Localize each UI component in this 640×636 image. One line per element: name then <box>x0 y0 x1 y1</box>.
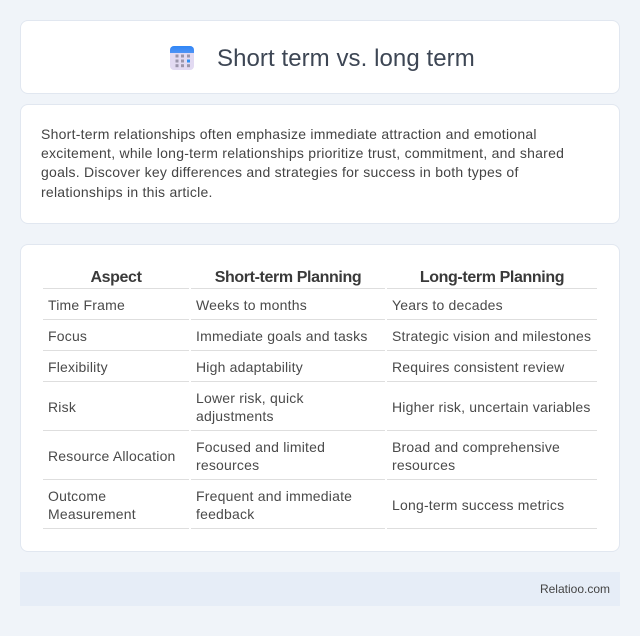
cell: Long-term success metrics <box>392 497 564 513</box>
row label: outcome measurement <box>48 488 136 522</box>
cell: Lower risk, quick <box>196 390 304 406</box>
text block: introduction: excitement, while long-term relationships prioritize trust, commitment, and shared <box>41 145 564 161</box>
panel: comparison table <box>20 244 620 552</box>
cell <box>392 439 560 473</box>
cell <box>196 390 304 424</box>
cell: Focused and limited <box>196 439 325 455</box>
text block: introduction <box>41 126 564 200</box>
cell: High adaptability <box>196 359 303 375</box>
row label: outcome measurement: Outcome <box>48 488 106 504</box>
footer <box>20 572 620 606</box>
row label: time frame: Time Frame <box>48 297 125 313</box>
cell: Immediate goals and tasks <box>196 328 368 344</box>
title: Short term vs. long term <box>217 45 475 72</box>
row label: resource allocation: Resource Allocation <box>48 448 176 464</box>
cell: Broad and comprehensive <box>392 439 560 455</box>
column heading: aspect: Aspect <box>90 269 142 286</box>
cell: Strategic vision and milestones <box>392 328 591 344</box>
row label: flexibility: Flexibility <box>48 359 108 375</box>
cell: Requires consistent review <box>392 359 564 375</box>
text block: introduction: Short-term relationships often emphasize immediate attraction and emotional <box>41 126 537 142</box>
row label: focus: Focus <box>48 328 87 344</box>
cell: feedback <box>196 506 254 522</box>
cell <box>196 439 325 473</box>
panel: title card <box>20 20 620 94</box>
cell: Frequent and immediate <box>196 488 352 504</box>
column heading: long-term planning: Long-term Planning <box>420 269 564 286</box>
cell: Higher risk, uncertain variables <box>392 399 591 415</box>
column heading: short-term planning: Short-term Planning <box>215 269 361 286</box>
row label: outcome measurement: Measurement <box>48 506 136 522</box>
icon: calendar <box>170 46 194 70</box>
cell: Weeks to months <box>196 297 307 313</box>
text block: introduction: relationships in this article. <box>41 184 213 200</box>
footer text: Relatioo.com <box>540 582 610 596</box>
cell: Years to decades <box>392 297 503 313</box>
cell: resources <box>392 457 455 473</box>
cell: resources <box>196 457 259 473</box>
row label: risk: Risk <box>48 399 76 415</box>
cell <box>196 488 352 522</box>
text block: introduction: goals. Discover key differences and strategies for success in both types of <box>41 164 519 180</box>
cell: adjustments <box>196 408 274 424</box>
panel: introduction <box>20 104 620 224</box>
